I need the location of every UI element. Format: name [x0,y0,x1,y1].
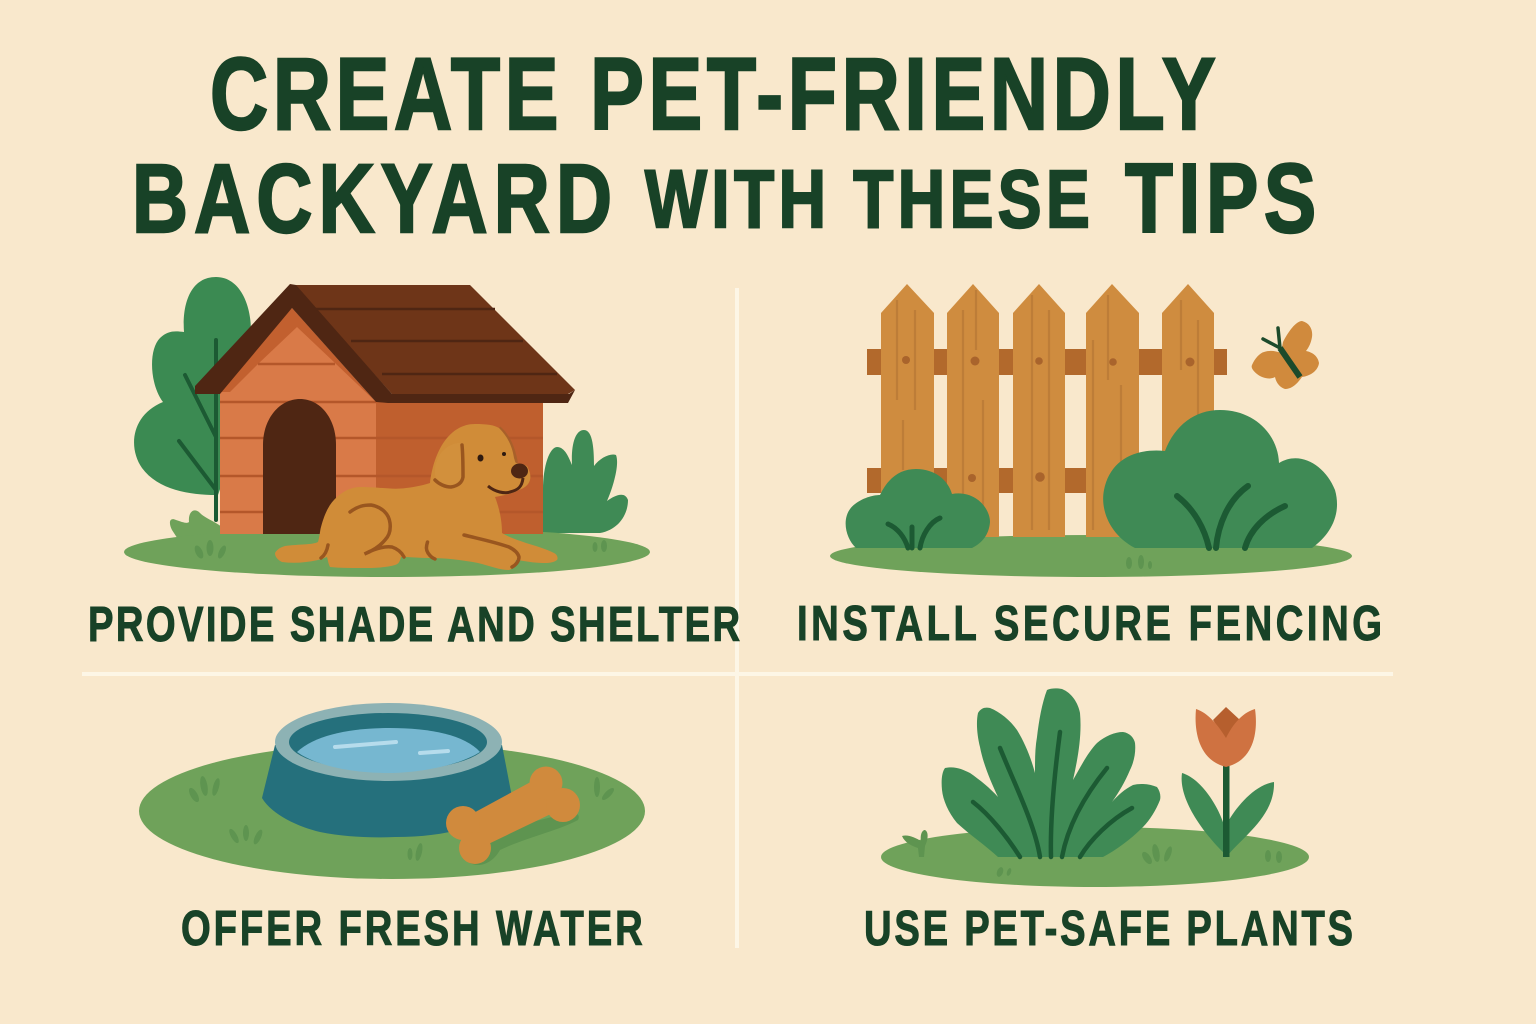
ground [881,827,1309,887]
title: BACKYARD [132,144,612,253]
icon: large bush [1103,410,1337,548]
ground [830,535,1352,577]
title: WITH THESE [645,153,1090,245]
title: TIPS [1125,144,1316,253]
title: CREATE PET-FRIENDLY [210,38,1216,151]
icon: bush right of doghouse [543,430,628,533]
icon: grass tufts [187,776,616,861]
label: provide shade and shelter: PROVIDE SHADE AND SHELTER [88,598,740,652]
label: use pet-safe plants: USE PET-SAFE PLANTS [864,902,1353,956]
icon: small bush [846,469,990,548]
panel: secure fencing [830,284,1352,577]
panel: fresh water [139,703,645,879]
icon: dog [275,424,558,570]
panel: shade and shelter [124,277,650,577]
icon: water bowl [262,703,512,837]
icon: tulip [1182,707,1274,857]
icon: grass tufts [902,830,1282,878]
panel: pet-safe plants [881,688,1309,887]
icon: doghouse [195,284,575,534]
title [132,38,1316,253]
icon: picket fence [867,284,1227,537]
icon: ground tufts [1126,555,1152,569]
icon: leafy plant [942,688,1160,857]
icon: ground tufts [193,540,607,560]
label: offer fresh water: OFFER FRESH WATER [181,902,643,956]
icon: tree behind doghouse [134,277,251,520]
icon: grass tuft left [170,510,226,550]
icon: butterfly [1252,321,1319,389]
icon: bone [446,766,580,865]
label: install secure fencing: INSTALL SECURE FENCING [797,597,1382,651]
ground [139,743,645,879]
ground [124,527,650,577]
